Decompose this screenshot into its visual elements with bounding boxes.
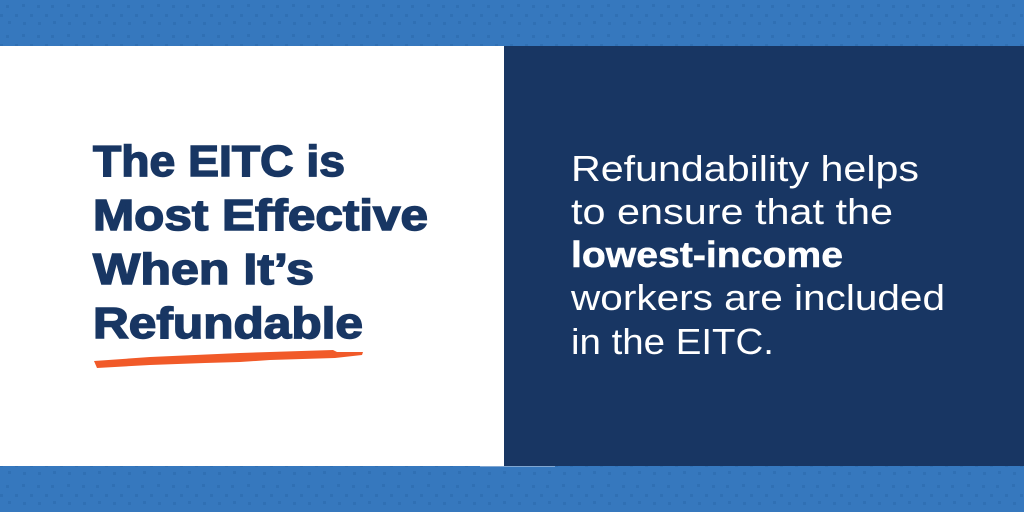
orange brush underline (94, 350, 363, 368)
heading: When It’s (93, 245, 314, 294)
panel: white heading panel (0, 46, 504, 466)
body text (570, 148, 945, 362)
heading (93, 137, 428, 348)
body text: workers are included (570, 277, 945, 318)
heading: Most Effective (93, 191, 428, 240)
body text: in the EITC. (571, 321, 774, 362)
bottom blue band (0, 466, 1024, 512)
body text: lowest-income (571, 234, 843, 275)
panel: navy text panel (504, 46, 1024, 466)
body text: Refundability helps (571, 148, 919, 189)
heading: Refundable (93, 299, 363, 348)
body text: to ensure that the (571, 191, 893, 232)
heading: The EITC is (93, 137, 345, 186)
top blue band (0, 0, 1024, 46)
